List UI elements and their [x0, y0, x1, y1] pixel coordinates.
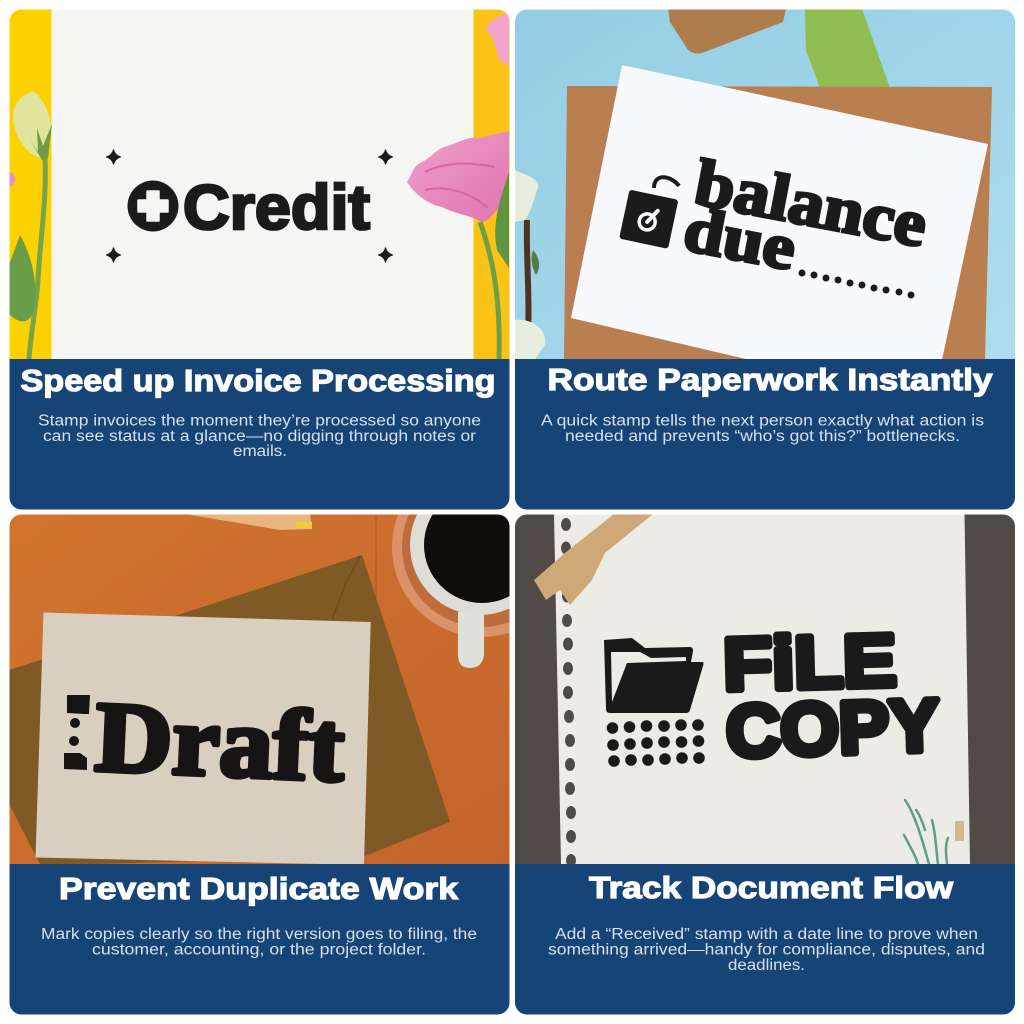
text: Draft: Draft [93, 681, 347, 803]
caption band [515, 359, 1015, 510]
body text: something arrived—handy for compliance, disputes, and [548, 942, 985, 958]
body text [541, 412, 984, 445]
panel: speed up invoice processing [5, 10, 510, 510]
text: Credit: Credit [183, 173, 370, 243]
panel: prevent duplicate work [10, 514, 510, 1014]
text: due: due [678, 193, 802, 284]
text: FILE: FiLE [722, 618, 897, 706]
photo: balance due card on kraft and blue [515, 9, 1015, 360]
dotted line [798, 270, 914, 298]
body text [38, 414, 480, 456]
heading: Track Document Flow [589, 870, 954, 905]
text: COPY: COPY [725, 683, 940, 773]
stamp: balance due [619, 146, 933, 298]
caption band [10, 359, 510, 510]
body text [548, 928, 984, 970]
panel: route paperwork instantly [515, 9, 1015, 510]
text: balance: balance [689, 146, 933, 262]
icon: dotted column [64, 695, 90, 770]
icon: padlock shackle [654, 177, 679, 188]
photo: draft card on envelope and wood desk [10, 514, 510, 864]
body text: can see status at a glance—no digging through notes or [43, 428, 476, 445]
icon: plus in circle [128, 180, 178, 232]
body text: deadlines. [728, 957, 805, 974]
caption band [515, 864, 1015, 1015]
body text [41, 926, 477, 958]
icon: open folder [604, 638, 704, 713]
icon: sparkles [106, 150, 393, 262]
photo: file copy notebook paper on dark board [515, 514, 1015, 867]
icon: open padlock [619, 190, 678, 249]
body text: Stamp invoices the moment they’re processed so anyone [38, 412, 481, 430]
photo: credit stamp card on yellow with flowers [5, 10, 510, 360]
icon: dot grid [607, 719, 705, 767]
caption band [10, 864, 510, 1015]
heading: Route Paperwork Instantly [548, 362, 993, 397]
heading: Speed up Invoice Processing [20, 363, 496, 398]
body text: Add a “Received” stamp with a date line to prove when [555, 926, 978, 943]
stamp: draft [64, 695, 346, 784]
body text: emails. [233, 443, 287, 460]
panel: track document flow [515, 514, 1015, 1015]
body text: needed and prevents “who’s got this?” bottlenecks. [565, 428, 960, 445]
stamp: file copy [604, 631, 941, 767]
body text: A quick stamp tells the next person exactly what action is [541, 412, 984, 430]
body text: Mark copies clearly so the right version goes to filing, the [41, 926, 477, 943]
heading: Prevent Duplicate Work [59, 871, 459, 906]
stamp: credit [106, 150, 393, 262]
body text: customer, accounting, or the project folder. [92, 942, 426, 958]
